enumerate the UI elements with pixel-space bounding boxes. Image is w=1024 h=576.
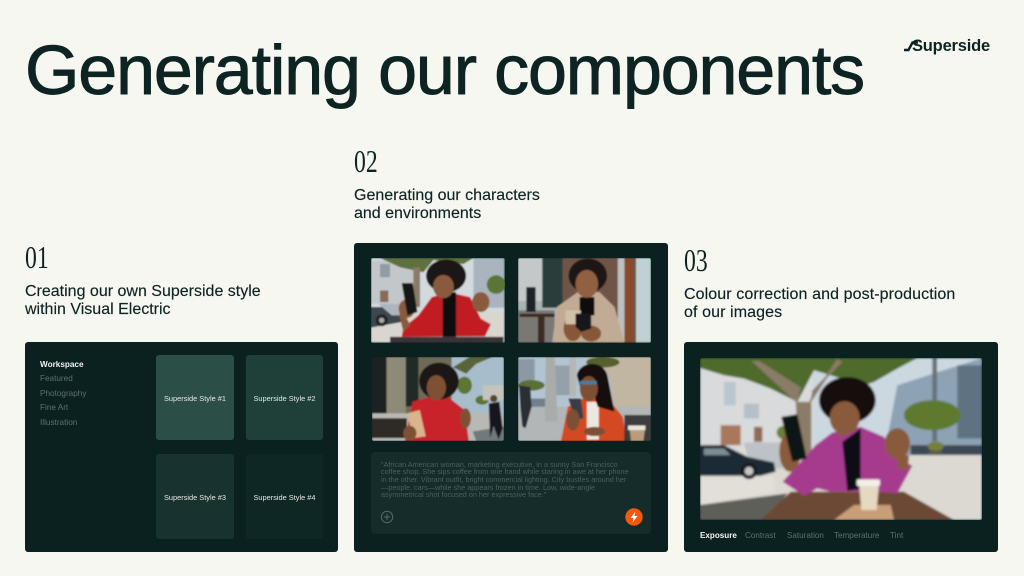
sidebar navigation: Illustration: [40, 418, 77, 426]
icon: orange lightning button: [625, 508, 643, 526]
prompt text: [381, 460, 629, 499]
panel: colour correction: [684, 342, 998, 552]
panel: style workspace: [25, 342, 338, 552]
adjustment tabs: [700, 530, 904, 540]
step 03 heading: [684, 286, 955, 321]
prompt box: [371, 452, 651, 534]
photo: woman in red sweater with tablet: [372, 357, 504, 441]
adjustment tabs: Contrast: [745, 530, 776, 540]
step 01 heading: [24, 283, 261, 318]
step 01 number: 01: [25, 239, 49, 275]
logo: Superside: Superside: [912, 37, 990, 55]
photo: woman with glasses in red-orange blazer: [518, 357, 651, 441]
step 01 heading: within Visual Electric: [25, 301, 171, 318]
step 03 heading: of our images: [684, 304, 782, 321]
step 03 heading: Colour correction and post-production: [684, 286, 955, 303]
panel: image generation: [354, 243, 668, 552]
sidebar navigation: Featured: [40, 374, 73, 383]
adjustment tabs: Tint: [890, 530, 903, 540]
sidebar navigation: Photography: [40, 388, 86, 398]
card: Superside Style #4: [246, 454, 323, 539]
prompt text: asymmetrical shot focused on her expressive face.": [381, 490, 546, 499]
prompt text: coffee shop. She sips coffee from one hand while staring in awe at her phone: [381, 467, 629, 476]
step 02 number: 02: [354, 143, 378, 179]
title: Generating our components: [25, 31, 864, 109]
step 02 heading: Generating our characters: [354, 187, 540, 204]
adjustment tabs: Exposure: [700, 530, 737, 540]
photo: woman in beige blazer with coffee: [518, 258, 651, 343]
photo: colour-corrected woman in magenta blazer: [700, 358, 982, 520]
card: Superside Style #1: [156, 355, 234, 440]
sidebar navigation: Fine Art: [40, 403, 68, 412]
card: Superside Style #2: Superside Style #2: [253, 394, 316, 403]
card: Superside Style #4: Superside Style #4: [253, 493, 316, 502]
card: Superside Style #1: Superside Style #1: [164, 394, 226, 403]
card: Superside Style #2: [246, 355, 323, 440]
prompt text: —people, cars—while she appears frozen in time. Low, wide-angle: [381, 483, 595, 492]
adjustment tabs: Saturation: [787, 530, 824, 540]
step 03 number: 03: [684, 242, 708, 278]
card: Superside Style #3: [156, 454, 234, 539]
prompt text: "African American woman, marketing executive, in a sunny San Francisco: [381, 460, 618, 468]
photo: woman in red blazer with phone: [371, 258, 505, 343]
sidebar navigation: [40, 360, 86, 426]
icon: add circle: [380, 510, 394, 524]
step 02 heading: [354, 187, 540, 222]
adjustment tabs: Temperature: [834, 530, 879, 540]
sidebar navigation: Workspace: [40, 360, 84, 368]
step 02 heading: and environments: [354, 205, 481, 222]
step 01 heading: Creating our own Superside style: [25, 283, 261, 300]
prompt text: in the other. Vibrant outfit, bright commercial lighting. City bustles around her: [381, 475, 626, 484]
card: Superside Style #3: Superside Style #3: [164, 493, 226, 502]
